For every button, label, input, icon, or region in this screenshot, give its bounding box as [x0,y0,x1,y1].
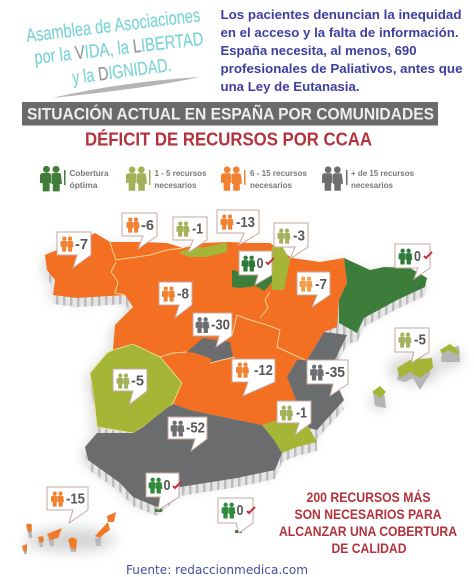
callout: Madrid -30: -30 [211,318,230,334]
islands: Canarias [22,512,116,554]
callout: Melilla 0: 0 [236,503,244,519]
callout: País Vasco 0: 0 [256,256,264,272]
region: Melilla [235,530,242,533]
legend item: 6-15 recursos: necesarios [250,181,293,190]
legend [40,166,415,191]
callout: Cataluña 0: 0 [414,249,421,265]
heading: déficit de recursos: DÉFICIT DE RECURSOS POR CCAA [85,128,372,150]
callout: Extremadura -5: -5 [131,374,144,390]
legend item: cobertura óptima: óptima [70,181,98,190]
map of Spain [22,233,462,554]
callout: Castilla y León -8 [159,282,192,318]
title line 2: por la VIDA, la LIBERTAD [33,29,204,69]
region: Murcia [262,410,317,453]
callout: Navarra -3: -3 [293,228,305,244]
region: orange mainland [45,233,347,425]
callout: Castilla-La Mancha -12: -12 [254,363,273,379]
callout: Valencia -35: -35 [325,365,345,381]
callout text: 200 recursos más [279,489,457,556]
title line 1: Asamblea de Asociaciones [25,5,201,47]
callout: Aragón -7: -7 [315,277,327,293]
legend item: 6-15 recursos: 6 - 15 recursos [250,169,308,178]
callout: Canarias -15 [47,487,88,523]
brush stroke under title [52,77,200,98]
legend item: 1-5 recursos: necesarios [154,181,197,190]
map shadow [25,237,462,552]
region: País Vasco [232,270,272,291]
callout: Melilla 0 [218,498,255,533]
callout: Castilla y León norte -13 [217,210,259,245]
legend item: cobertura óptima: Cobertura [70,169,109,178]
callout: Andalucía -52: -52 [186,420,205,436]
callout: Castilla y León norte -13: -13 [236,215,255,231]
callout line 4: DE CALIDAD [332,540,406,556]
callout: Baleares -5: -5 [414,332,426,348]
title: Asamblea de Asociaciones [25,5,204,89]
callout line 2: SON NECESARIOS PARA [294,506,442,522]
region: Navarra [270,246,290,290]
banner heading: SITUACIÓN ACTUAL EN ESPAÑA POR COMUNIDADES [27,104,434,124]
callout: Ceuta 0: 0 [164,478,170,494]
legend item: 1-5 recursos: 1 - 5 recursos [154,169,207,178]
region: Madrid [187,338,233,363]
source line: Fuente: redaccionmedica.com [126,562,308,577]
callout: Castilla-La Mancha -12 [232,359,275,396]
region: Cantabria [178,242,227,257]
text line 3: España necesita, al menos, 690 [220,44,417,58]
legend item: cobertura óptima [40,166,109,191]
text line 5: una Ley de Eutanasia. [220,80,360,94]
region: Extremadura [90,344,182,433]
callout: Asturias -6 [122,213,157,249]
text line 1: Los pacientes denuncian la inequidad [220,8,462,22]
callout: Cantabria -1: -1 [192,222,203,238]
region: Comunidad Valenciana [287,332,347,430]
legend item: 6-15 recursos [221,166,308,191]
legend item: 1-5 recursos [126,166,207,191]
callout: Murcia -1: -1 [296,406,307,422]
callout: Castilla y León -8: -8 [177,286,189,302]
title line 3: y la DIGNIDAD. [71,55,173,89]
callout: Madrid -30 [193,313,232,347]
region: Cataluña [339,258,427,333]
legend item: más de 15 recursos: necesarios [351,181,394,190]
callout: Aragón -7 [297,272,330,307]
islands: Baleares [372,344,460,408]
callout: Murcia -1 [277,401,311,435]
region: Andalucía [85,404,282,507]
callout: Galicia -7 [57,232,91,268]
text block: denuncia de los pacientes [220,8,463,94]
legend item: más de 15 recursos [322,166,415,191]
callout: Baleares -5 [395,328,429,363]
text line 2: en el acceso y la falta de información. [220,26,458,40]
text line 4: profesionales de Paliativos, antes que [220,62,463,76]
callout: Ceuta 0 [146,473,181,510]
callout: Valencia -35 [307,360,348,396]
callout: Canarias -15: -15 [66,492,85,508]
callout: Navarra -3 [274,223,308,259]
callout: Asturias -6: -6 [141,218,154,234]
callout: Cataluña 0 [395,244,432,279]
legend item: más de 15 recursos: + de 15 recursos [351,169,415,178]
region: Ceuta [155,509,162,512]
region boundaries [110,242,305,363]
map extrusion [45,242,427,516]
callout: País Vasco 0 [239,251,274,285]
callout: Andalucía -52 [168,417,207,451]
callout line 1: 200 RECURSOS MÁS [306,489,430,505]
callout: Galicia -7: -7 [75,237,88,253]
callout: Extremadura -5 [113,369,147,405]
callout: Cantabria -1 [173,217,207,253]
